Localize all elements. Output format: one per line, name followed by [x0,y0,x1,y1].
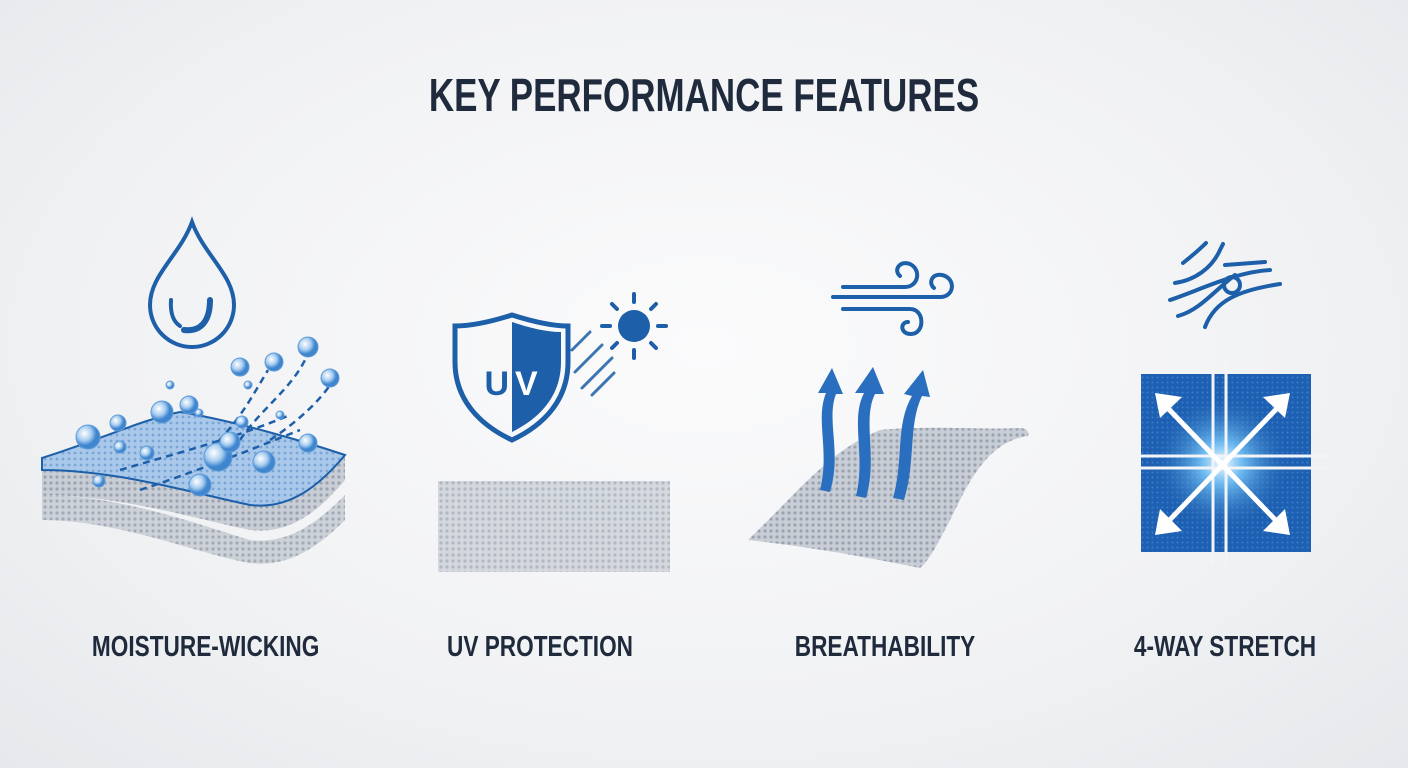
fabric swatch [438,481,670,572]
icon: 4-way stretch square [1125,360,1327,565]
breathable fabric with arrows [748,367,1029,568]
icon: UV shield [455,315,568,440]
label: moisture-wicking: MOISTURE-WICKING [92,631,319,663]
icon: sun with rays [572,294,666,395]
fabric layers with droplets [42,337,345,564]
label: 4-way stretch: 4-WAY STRETCH [1134,631,1316,663]
title: KEY PERFORMANCE FEATURES [429,69,979,121]
icon: UV shield: U [484,365,509,403]
label: uv protection: UV PROTECTION [447,631,633,663]
icon: water drop [150,222,234,347]
icon: stretch fibers [1170,243,1280,327]
icon: wind [833,263,952,334]
label: breathability: BREATHABILITY [795,631,975,663]
icon: UV shield: V [515,365,538,403]
